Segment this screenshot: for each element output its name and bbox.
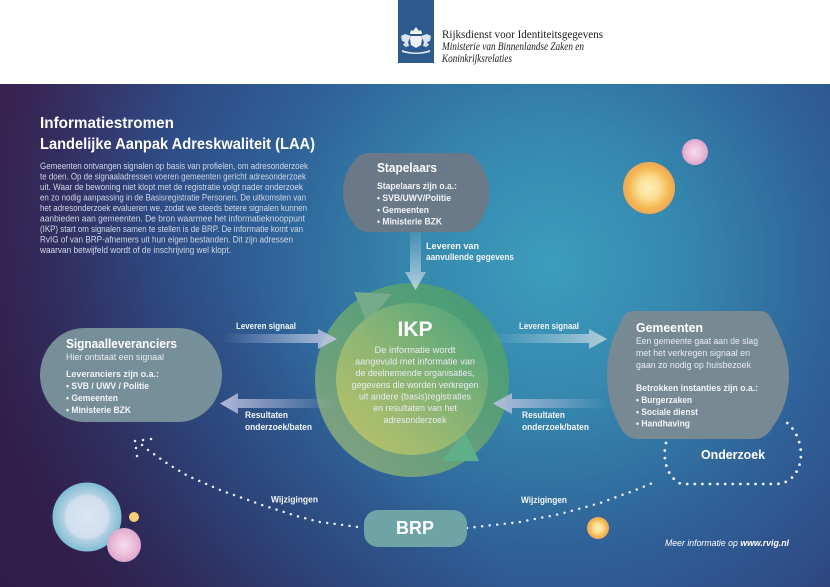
header background xyxy=(0,0,830,84)
icon: planet orange small xyxy=(587,517,609,539)
icon: planet pink top xyxy=(682,139,708,165)
icon: planet pink bottom xyxy=(107,528,141,562)
intro text: RvIG of van BRP-afnemers uit hun eigen bestanden. Dit zijn adressen xyxy=(40,234,293,244)
IKP circle: aangevuld met informatie van xyxy=(355,356,475,368)
intro text xyxy=(39,161,308,255)
panel: stapelaars: Stapelaars xyxy=(377,160,437,175)
ministry name: Koninkrijksrelaties xyxy=(441,53,512,65)
panel: gemeenten: gaan zo nodig op huisbezoek xyxy=(636,360,751,371)
panel: gemeenten: • Burgerzaken xyxy=(636,395,692,405)
panel: stapelaars: • Ministerie BZK xyxy=(377,216,442,226)
panel: gemeenten: • Sociale dienst xyxy=(636,407,698,417)
panel: signaalleveranciers: • Ministerie BZK xyxy=(66,405,131,415)
intro text: uit. Waar de bewoning niet klopt met de registratie volgt nader onderzoek xyxy=(40,182,303,192)
panel: signaalleveranciers: • Gemeenten xyxy=(66,393,118,403)
panel: gemeenten: met het verkregen signaal en xyxy=(636,348,750,359)
label: leveren van aanvullende gegevens xyxy=(426,241,514,262)
IKP circle: en resultaten van het xyxy=(373,403,457,414)
intro text: te doen. Op de signaaladressen voeren gemeenten gericht adresonderzoek xyxy=(40,172,306,182)
intro text: Gemeenten ontvangen signalen op basis van profielen, om adresonderzoek xyxy=(40,161,308,171)
panel: stapelaars: • SVB/UWV/Politie xyxy=(377,193,451,203)
label: resultaten left: Resultaten xyxy=(245,410,288,420)
label: resultaten right: onderzoek/baten xyxy=(522,422,589,432)
panel: stapelaars: • Gemeenten xyxy=(377,205,429,215)
IKP circle: adresonderzoek xyxy=(384,415,447,426)
panel: gemeenten xyxy=(607,311,789,439)
title: Informatiestromen xyxy=(40,115,174,132)
label: leveren van aanvullende gegevens: aanvullende gegevens xyxy=(426,252,514,262)
logo: Rijksoverheid emblem xyxy=(398,0,434,63)
arrow: resultaten right xyxy=(493,393,607,414)
label: onderzoek: Onderzoek xyxy=(701,447,766,462)
arrow: resultaten left xyxy=(220,393,336,414)
panel: stapelaars xyxy=(343,153,489,232)
intro text: aanbieden aan gemeenten. De bron waarmee het informatieknooppunt xyxy=(40,214,305,224)
icon: planet orange large xyxy=(623,162,675,214)
dotted line: signaalleveranciers to BRP xyxy=(135,439,358,527)
label: wijzigingen right: Wijzigingen xyxy=(521,495,567,505)
label: resultaten left: onderzoek/baten xyxy=(245,422,312,432)
arrow: leveren signaal left xyxy=(222,329,337,349)
panel: signaalleveranciers xyxy=(40,328,222,422)
label: leveren signaal right: Leveren signaal xyxy=(519,321,579,331)
icon: cycle arrow top left xyxy=(354,292,392,323)
title xyxy=(40,115,315,153)
panel: gemeenten: • Handhaving xyxy=(636,418,690,428)
icon: planet blue large xyxy=(52,482,122,552)
label: resultaten left xyxy=(245,410,312,432)
arrow: leveren signaal right xyxy=(490,329,607,349)
panel: signaalleveranciers: Leveranciers zijn o.a.: xyxy=(66,369,159,379)
panel: signaalleveranciers: • SVB / UWV / Politie xyxy=(66,381,149,391)
panel: gemeenten: Gemeenten xyxy=(636,320,703,335)
dotted line: BRP to gemeenten xyxy=(467,482,655,528)
footer link: Meer informatie op www.rvig.nl xyxy=(665,538,789,549)
intro text: en zo nodig aanpassing in de Basisregistratie Personen. De uitkomsten van xyxy=(40,192,306,202)
label: wijzigingen left: Wijzigingen xyxy=(271,494,318,504)
IKP circle: uit andere (basis)registraties xyxy=(359,392,471,402)
panel: signaalleveranciers: Signaalleveranciers xyxy=(66,336,177,351)
intro text: waarvan betwijfeld wordt of de inschrijving wel klopt. xyxy=(39,245,231,255)
ministry name: Rijksdienst voor Identiteitsgegevens xyxy=(442,27,603,41)
title: Landelijke Aanpak Adreskwaliteit (LAA) xyxy=(40,136,315,153)
panel: gemeenten: Betrokken instanties zijn o.a.: xyxy=(636,383,758,393)
label: resultaten right xyxy=(522,410,589,432)
panel: BRP xyxy=(364,510,467,547)
IKP circle: gegevens die worden verkregen xyxy=(352,380,478,391)
icon: cycle arrow bottom right xyxy=(442,432,479,461)
IKP circle xyxy=(315,283,509,477)
intro text: (IKP) start om signalen samen te stellen is de BRP. De informatie komt van xyxy=(40,224,303,234)
panel: BRP: BRP xyxy=(396,518,434,538)
panel: signaalleveranciers: Hier ontstaat een signaal xyxy=(66,352,164,363)
arrow: stapelaars to IKP xyxy=(405,232,426,290)
panel: stapelaars: Stapelaars zijn o.a.: xyxy=(377,181,457,191)
dotted loop: onderzoek xyxy=(665,422,801,484)
ministry name xyxy=(441,27,603,65)
label: leveren signaal left: Leveren signaal xyxy=(236,321,296,331)
IKP circle: De informatie wordt xyxy=(374,345,456,356)
icon: planet small yellow xyxy=(129,512,139,522)
panel: gemeenten: Een gemeente gaat aan de slag xyxy=(636,336,758,347)
ministry name: Ministerie van Binnenlandse Zaken en xyxy=(441,41,584,53)
IKP circle: IKP xyxy=(397,318,433,341)
label: resultaten right: Resultaten xyxy=(522,410,565,420)
intro text: het adresonderzoek evalueren we, zodat we steeds betere signalen kunnen xyxy=(40,203,307,213)
label: leveren van aanvullende gegevens: Leveren van xyxy=(426,241,479,251)
IKP circle: de deelnemende organisaties, xyxy=(356,368,474,379)
